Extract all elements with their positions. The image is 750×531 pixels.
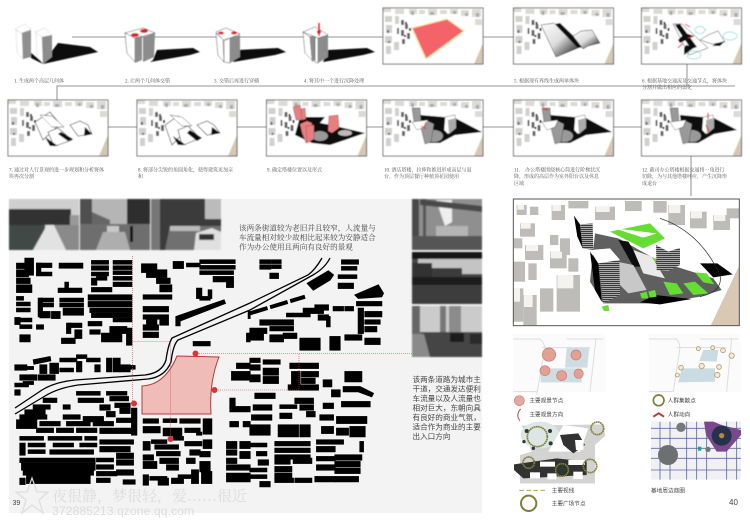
legend: view node: 主要观景节点 — [529, 396, 564, 404]
thumbnail: step 11 — [514, 100, 614, 156]
site plot — [142, 356, 219, 414]
step 3 massing — [216, 28, 286, 63]
thumbnail: step 7 — [8, 100, 108, 156]
text: secondary street note: 作为办公使用且两向有良好的景观 — [239, 242, 353, 252]
step 1 massing — [15, 24, 98, 64]
step 4 massing — [303, 23, 375, 63]
street photos, top right — [412, 199, 482, 357]
watermark: 夜很静，梦很轻，爱……很近 — [52, 487, 247, 505]
text: secondary street note — [239, 222, 376, 252]
step captions: 6. 根据基地交通流及交通节点，将体块 — [642, 78, 727, 84]
legend: crowd point: 人群集散点 — [668, 396, 696, 404]
legend: sightline: 主要视线 — [552, 487, 575, 495]
step captions: 12. 截司办公塔楼根据交通将一角进行 — [642, 166, 725, 174]
thumbnail: site plot — [383, 8, 483, 64]
plaza plan — [514, 422, 605, 483]
text: main road note: 有良好的商业气氛， — [412, 412, 481, 422]
thumbnail: step 8 — [137, 100, 237, 156]
3D perspective view — [513, 199, 739, 326]
step captions: 和 — [138, 173, 143, 180]
legend: view direction: 主要观景方向 — [529, 410, 564, 418]
diagram: view nodes — [513, 334, 606, 395]
thumbnail: step 12 — [642, 100, 742, 156]
process connector lines — [57, 37, 741, 196]
street photos, top left — [9, 199, 221, 250]
road double line — [15, 258, 330, 414]
page number left: 39 — [12, 500, 20, 507]
legend: sightline — [519, 487, 575, 495]
step captions: 降，形成的高层作为室外阳台以及休息 — [514, 173, 600, 180]
thumbnail: step 9 towers — [266, 100, 366, 156]
page background panel — [9, 199, 482, 513]
sightline dotted lines — [132, 256, 412, 439]
thumbnail: step 10 — [383, 100, 483, 156]
step captions: 块再次分割 — [9, 173, 34, 180]
step captions: 11. 办公塔楼围绕核心筒进行阶梯状沉 — [514, 166, 600, 174]
watermark — [16, 478, 247, 518]
step captions: 区域 — [514, 180, 524, 187]
step captions: 成退台 — [642, 180, 657, 187]
caption: trade area: 基地周边商圈 — [651, 487, 685, 495]
step captions: 1. 生成两个高层几何体 — [14, 78, 64, 84]
text: main road note: 出入口方向 — [412, 431, 450, 441]
step captions: 8. 将部分尖锐的角圆角化，使得建筑更加亲 — [138, 166, 233, 174]
legend: crowd flow: 人群动向 — [668, 410, 691, 418]
thumbnail: two volumes — [514, 8, 614, 64]
step captions: 2. 让两个几何体交错 — [125, 78, 170, 84]
legend: view direction — [518, 409, 564, 421]
figure-ground site map — [15, 256, 412, 487]
thumbnail: circulation split — [642, 8, 742, 64]
legends and plan, lower right — [514, 395, 741, 511]
trade area map — [651, 422, 741, 480]
watermark: 372885213.qzone.qq.com — [52, 504, 194, 518]
step captions — [9, 78, 727, 187]
legend: view node — [514, 396, 564, 406]
text: main road note: 相对巨大，东朝向具 — [412, 402, 481, 412]
step captions: 台，作为顶层餐厅种植顶花园使用 — [384, 173, 459, 180]
view point dots — [131, 350, 218, 442]
step captions: 分割并做出相应的弱化 — [642, 84, 692, 91]
step captions: 10. 酒店塔楼，拉伸和推进形成高层与退 — [384, 166, 472, 174]
text: secondary street note: 该两条街道较为老旧并且较窄，人流量与 — [239, 222, 376, 234]
step captions: 切除，为与其他塔楼呼应，产生沉降形 — [642, 173, 727, 180]
step 2 massing — [125, 28, 200, 63]
building footprints west half — [15, 258, 250, 485]
legend: plaza node — [521, 496, 586, 511]
legend: crowd point — [653, 395, 696, 406]
page number right: 40 — [729, 498, 738, 507]
step captions: 7. 通过对人行景观的进一步规划和分析将体 — [9, 166, 104, 174]
text: main road note: 该两条道路为城市主 — [412, 374, 481, 384]
legend: plaza node: 主要广场节点 — [552, 499, 586, 507]
text: secondary street note: 车流量相对较少故相比起来较为安静适合 — [239, 232, 376, 242]
diagram: crowd points — [649, 334, 741, 392]
building footprints east half — [250, 260, 383, 487]
legend: crowd flow — [653, 410, 691, 418]
text: main road note: 干道，交通发达便利 — [412, 384, 481, 394]
text: main road note: 车流量以及人流量也 — [412, 393, 481, 403]
step captions: 9. 确定塔楼位置以及形式 — [267, 166, 322, 174]
text: main road note — [412, 374, 481, 441]
text: main road note: 适合作为商业的主要 — [412, 422, 481, 432]
step captions: 3. 交错后再进行穿插 — [214, 78, 259, 84]
step captions: 4. 将其中一个进行沉降处理 — [304, 78, 364, 84]
step captions: 5. 根据现有界线生成两单体块 — [514, 78, 579, 84]
